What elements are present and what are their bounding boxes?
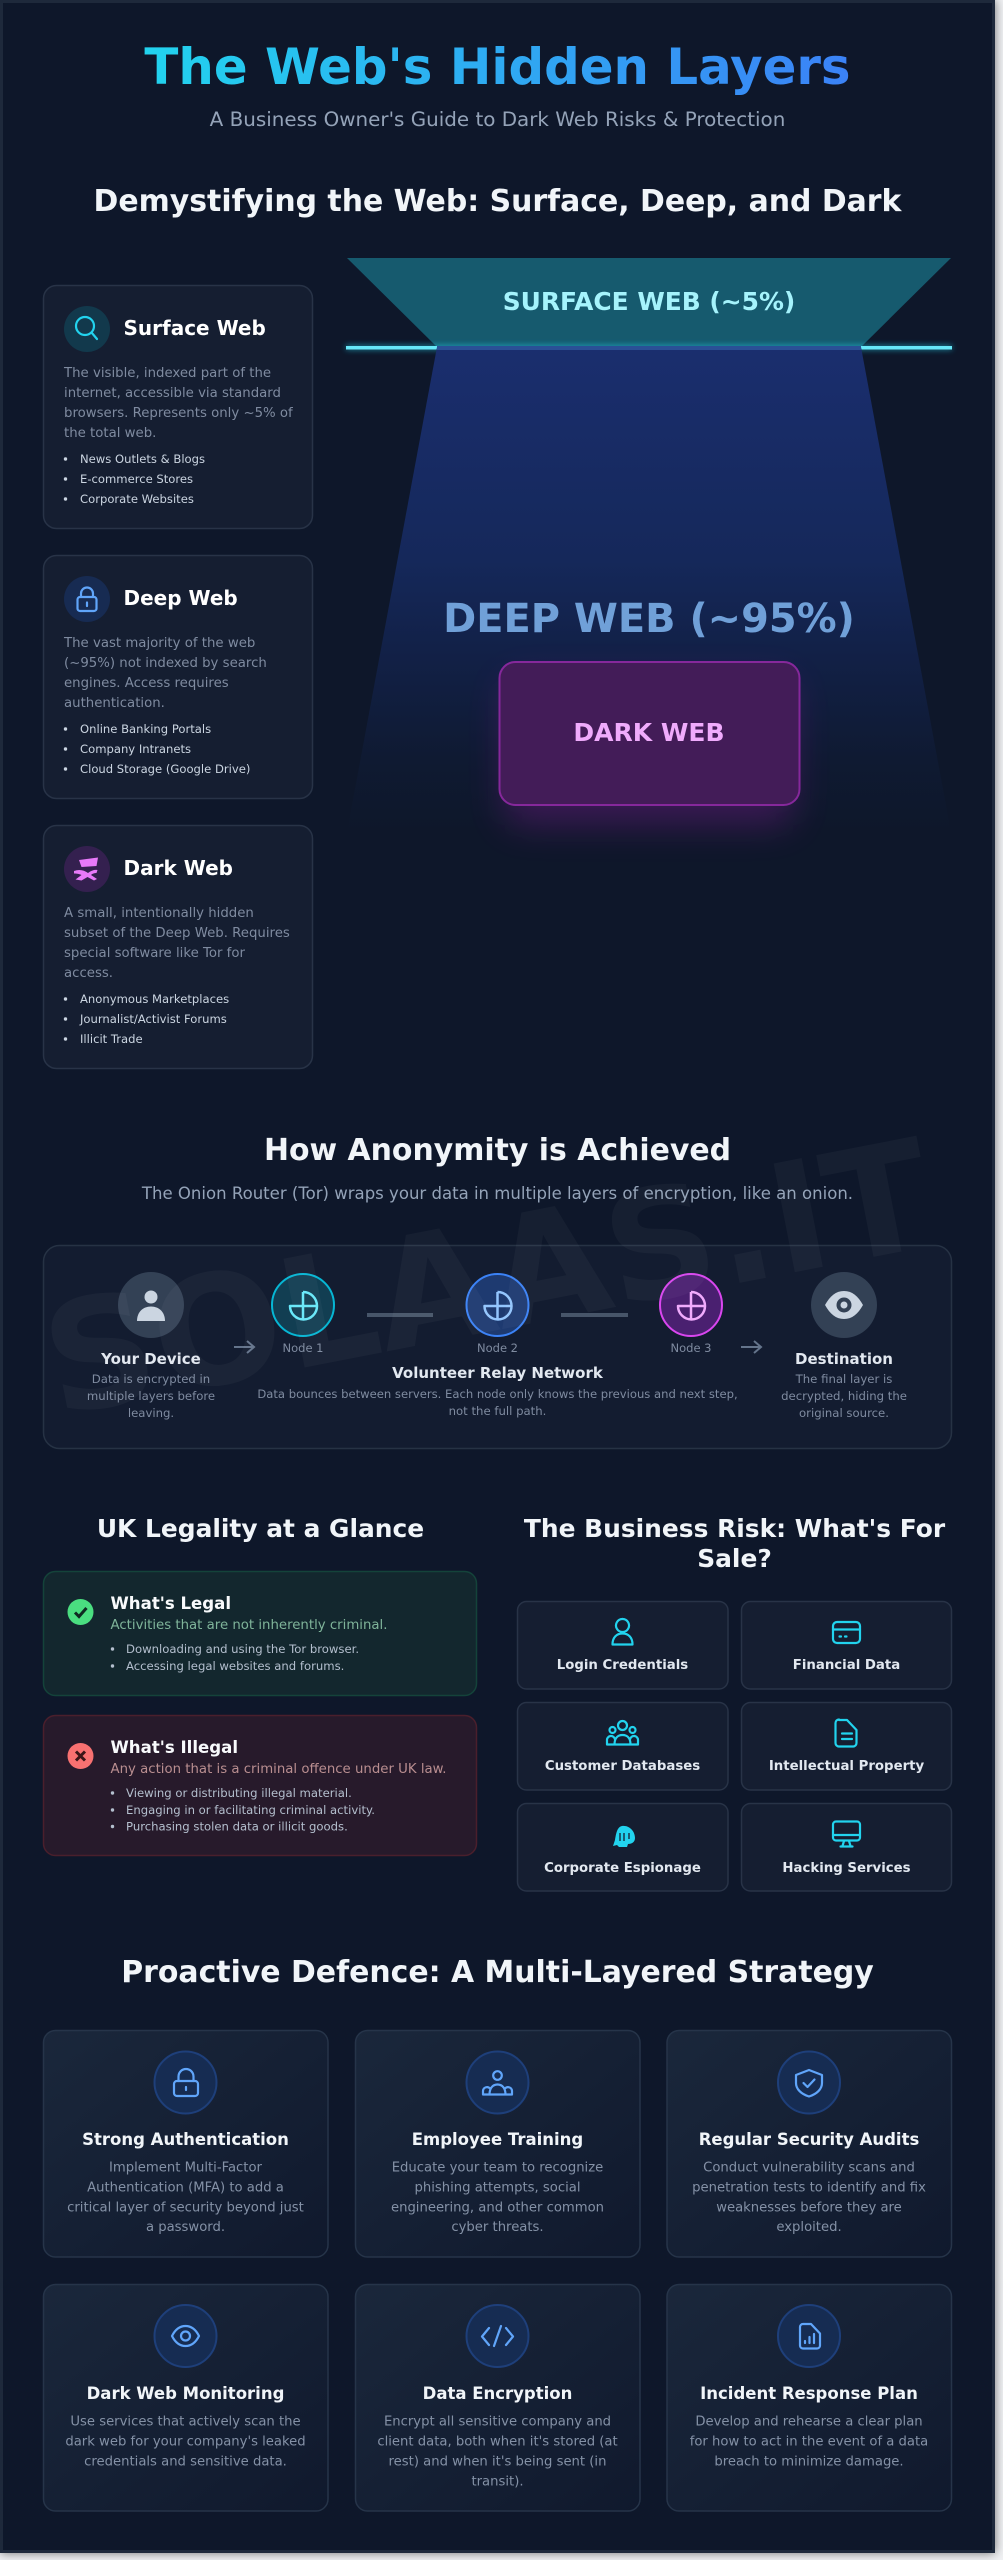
defence card: incident response plan: Incident Response Plan [700,2384,918,2403]
panel: surface web card [44,286,312,528]
node 1: Node 1 [282,1341,324,1355]
panel: deep web card [44,556,312,798]
defence card: strong authentication: Strong Authentication [82,2130,289,2149]
step: destination: decrypted, hiding the [781,1389,907,1403]
panel: what's illegal [44,1716,476,1856]
risk card: hacking services [742,1804,952,1891]
diagram: web layers funnel [346,258,952,832]
defence card: incident response plan: breach to minimize damage. [714,2454,904,2470]
icon: cross [68,1743,94,1769]
card description: authentication. [64,696,165,711]
examples list: Journalist/Activist Forums [79,1012,227,1026]
risk card: customer databases [518,1702,728,1790]
defence card: data encryption [356,2284,640,2511]
panel: dark web card [44,826,312,1068]
risk card: intellectual property: Intellectual Property [769,1759,925,1774]
step: destination: The final layer is [795,1372,892,1386]
defence card: dark web monitoring: Dark Web Monitoring [87,2384,284,2403]
defence card: regular security audits [667,2030,952,2257]
risk card: hacking services: Hacking Services [782,1861,911,1876]
examples list: Company Intranets [80,742,191,756]
defence card: employee training: Employee Training [412,2130,583,2149]
surface line [346,345,952,350]
card description: A small, intentionally hidden [64,906,254,921]
step: destination [781,1272,907,1420]
relay network caption: Data bounces between servers. Each node only knows the previous and next step, [257,1387,738,1401]
panel: tor relay diagram [44,1246,952,1448]
examples list [64,722,250,776]
step: your device [87,1272,215,1420]
examples list: E-commerce Stores [80,472,193,486]
node 2: Node 2 [477,1341,518,1355]
card description: The vast majority of the web [63,636,255,651]
heading: uk legality: UK Legality at a Glance [97,1514,424,1543]
defence card: strong authentication: Authentication (MFA) to add a [87,2180,284,2196]
icon: dark web mask [64,846,110,892]
card description: browsers. Represents only ~5% of [64,406,293,421]
illegal subtitle: Any action that is a criminal offence under UK law. [110,1762,447,1777]
icon: lock [64,576,110,622]
illegal list: Engaging in or facilitating criminal activity. [126,1803,375,1817]
risk card: corporate espionage: Corporate Espionage [544,1861,701,1876]
defence card: incident response plan [667,2284,952,2511]
defence card: strong authentication: Implement Multi-Factor [109,2160,263,2176]
card title: Deep Web [124,586,238,610]
node 2 [466,1274,528,1355]
defence card: employee training: Educate your team to recognize [392,2160,603,2176]
defence card: dark web monitoring [44,2284,328,2511]
card description [63,366,293,441]
dark web box [500,662,800,825]
step: your device: leaving. [128,1406,174,1420]
step: your device: Data is encrypted in [92,1372,210,1386]
section intro: The Onion Router (Tor) wraps your data in multiple layers of encryption, like an onion. [141,1184,853,1203]
defence card: data encryption: transit). [471,2474,524,2490]
risk card: customer databases: Customer Databases [545,1759,700,1774]
deep web trapezoid [347,347,951,832]
legal list: Downloading and using the Tor browser. [126,1642,359,1656]
deep web label: DEEP WEB (~95%) [443,596,855,642]
illegal list: Viewing or distributing illegal material. [126,1786,352,1800]
step: your device: multiple layers before [87,1389,215,1403]
card description: the total web. [64,426,156,441]
examples list [64,452,205,506]
legal title: What's Legal [110,1594,231,1613]
illegal list [111,1786,375,1834]
relay network caption [257,1364,738,1418]
subtitle: A Business Owner's Guide to Dark Web Risks & Protection [210,108,785,131]
relay network caption: not the full path. [449,1404,546,1418]
defence card: regular security audits: Regular Security Audits [699,2130,919,2149]
arrow: device to node 1 [234,1341,254,1353]
card description: The visible, indexed part of the [63,366,271,381]
defence card: data encryption: Encrypt all sensitive company and [384,2414,611,2430]
watermark: SOLAAS.IT [30,1106,945,1451]
defence card: strong authentication: critical layer of security beyond just [67,2200,304,2216]
heading: business risk [524,1514,946,1573]
title: The Web's Hidden Layers [144,38,851,96]
illegal title: What's Illegal [110,1738,238,1757]
heading: business risk: Sale? [697,1544,772,1573]
card description: access. [64,966,113,981]
defence card: regular security audits: weaknesses before they are [716,2200,902,2216]
surface web trapezoid [347,258,951,347]
card description: special software like Tor for [64,946,245,961]
defence card: data encryption: rest) and when it's being sent (in [389,2454,606,2470]
defence card: dark web monitoring: credentials and sensitive data. [84,2454,287,2470]
legal list [111,1642,359,1673]
card description [63,636,267,711]
node 3 [660,1274,722,1355]
defence card: employee training [356,2030,640,2257]
panel: what's legal [44,1572,476,1696]
legal list: Accessing legal websites and forums. [126,1659,344,1673]
examples list: Anonymous Marketplaces [80,992,229,1006]
examples list: News Outlets & Blogs [80,452,205,466]
examples list [64,992,229,1046]
defence card: employee training: engineering, and other common [391,2200,604,2216]
arrow: node 3 to destination [741,1341,761,1353]
heading: business risk: The Business Risk: What's For [524,1514,946,1543]
defence card: regular security audits: penetration tests to identify and fix [692,2180,926,2196]
card title: Surface Web [124,316,266,340]
defence card: data encryption: Data Encryption [423,2384,572,2403]
heading: how anonymity is achieved: How Anonymity is Achieved [264,1133,731,1168]
step: destination: Destination [795,1350,893,1368]
card title: Dark Web [124,856,233,880]
heading: proactive defence: Proactive Defence: A Multi-Layered Strategy [121,1955,874,1990]
risk card: corporate espionage [518,1804,728,1891]
defence card: regular security audits: exploited. [776,2220,842,2235]
defence card: data encryption: client data, both when it's stored (at [377,2434,618,2450]
risk card: login credentials [518,1602,728,1689]
connector [561,1313,628,1317]
node 3: Node 3 [670,1341,712,1355]
risk card: financial data: Financial Data [793,1658,900,1673]
defence card: strong authentication [44,2030,328,2257]
defence card: employee training: phishing attempts, social [415,2180,580,2196]
step: your device: Your Device [100,1350,201,1368]
heading: demystifying the web: Demystifying the Web: Surface, Deep, and Dark [94,184,903,219]
defence card: incident response plan: Develop and rehearse a clear plan [695,2414,923,2430]
legal subtitle: Activities that are not inherently criminal. [110,1618,387,1633]
connector [367,1313,433,1317]
examples list: Online Banking Portals [80,722,211,736]
risk card: intellectual property [742,1702,952,1790]
illegal list: Purchasing stolen data or illicit goods. [126,1820,348,1834]
surface web label: SURFACE WEB (~5%) [503,287,795,316]
card description: (~95%) not indexed by search [64,656,267,671]
step: destination: original source. [799,1406,889,1420]
defence card: dark web monitoring: dark web for your company's leaked [65,2434,306,2450]
examples list: Illicit Trade [80,1032,143,1046]
node 1 [272,1274,334,1355]
examples list: Cloud Storage (Google Drive) [80,762,250,776]
defence card: employee training: cyber threats. [451,2220,544,2235]
icon: magnifier [64,306,110,352]
defence card: incident response plan: for how to act in the event of a data [690,2434,928,2450]
card description: internet, accessible via standard [64,386,281,401]
card description [64,906,290,981]
card description: engines. Access requires [64,676,229,691]
defence card: dark web monitoring: Use services that actively scan the [70,2414,301,2430]
relay network caption: Volunteer Relay Network [392,1364,604,1382]
dark web box: DARK WEB [573,718,725,747]
defence card: regular security audits: Conduct vulnerability scans and [703,2160,915,2176]
risk card: financial data [742,1602,952,1689]
risk card: login credentials: Login Credentials [557,1658,688,1673]
card description: subset of the Deep Web. Requires [64,926,290,941]
icon: check [68,1599,94,1625]
defence card: strong authentication: a password. [146,2220,225,2235]
examples list: Corporate Websites [80,492,194,506]
